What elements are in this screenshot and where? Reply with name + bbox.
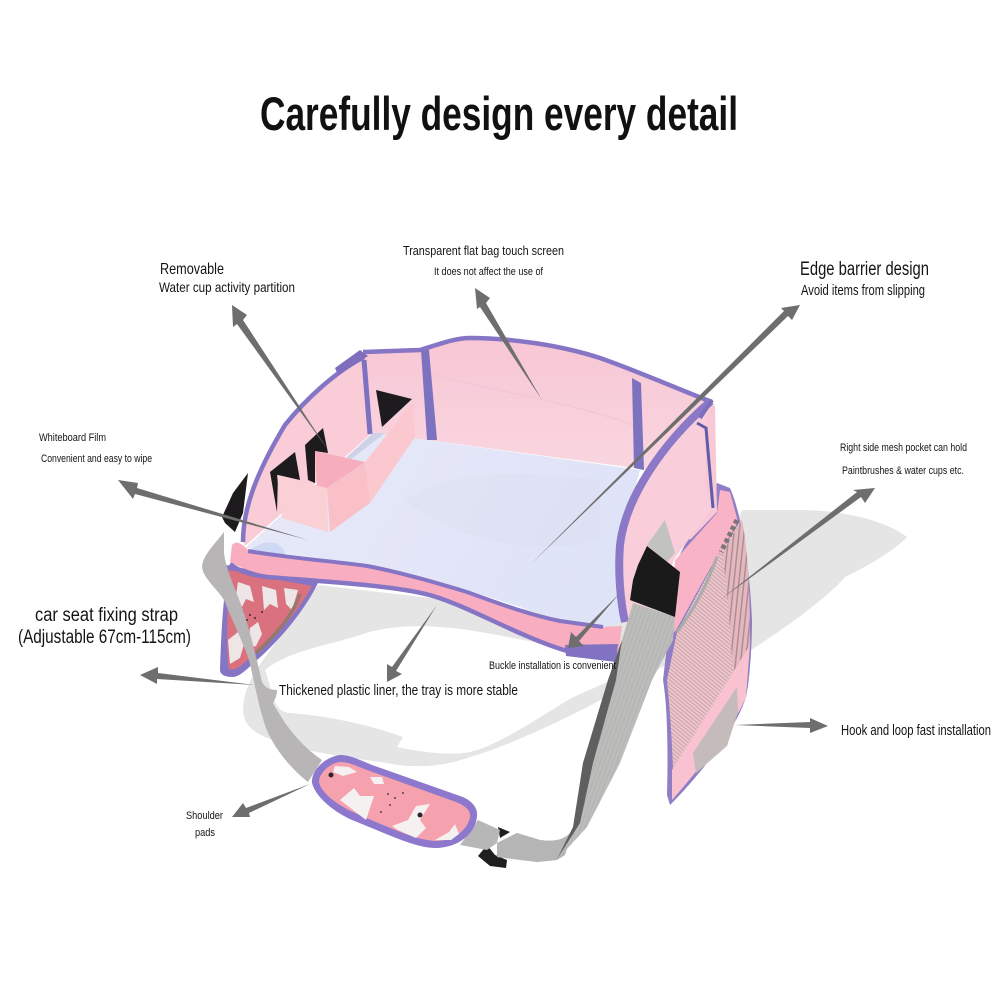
- left strap: [202, 532, 322, 782]
- label: transparent touch screen bag: It does not affect the use of: [434, 266, 544, 278]
- slider buckle: [478, 827, 510, 868]
- label: removable partition: Water cup activity partition: [159, 279, 295, 295]
- right strap: [460, 520, 675, 862]
- label: whiteboard film: Convenient and easy to wipe: [41, 453, 152, 465]
- label: car seat fixing strap: (Adjustable 67cm-115cm): [18, 627, 191, 648]
- label: whiteboard film: Whiteboard Film: [39, 432, 106, 444]
- arrow: hook and loop: [735, 718, 828, 733]
- label: removable partition: Removable: [160, 261, 224, 278]
- right wall exterior: [680, 405, 717, 540]
- mesh pocket: [667, 520, 750, 770]
- arrow: removable partition: [232, 305, 328, 450]
- removable water cup partition: [277, 402, 415, 532]
- label: edge barrier: Edge barrier design: [800, 259, 929, 280]
- title: Carefully design every detail: [260, 87, 738, 140]
- label: transparent touch screen bag: Transparent flat bag touch screen: [403, 243, 564, 258]
- label: shoulder pads: pads: [195, 827, 215, 839]
- arrow: car seat strap: [140, 667, 255, 685]
- right buckle: [630, 546, 680, 617]
- label: plastic liner: Thickened plastic liner, the tray is more stable: [279, 682, 518, 699]
- left buckle: [222, 473, 248, 532]
- back wall: [363, 338, 712, 470]
- arrow: right mesh pocket: [720, 488, 875, 600]
- arrow: buckle: [568, 593, 620, 648]
- arrow: transparent screen pocket: [475, 288, 542, 400]
- label: car seat fixing strap: car seat fixing strap: [35, 605, 178, 626]
- label: whiteboard film: [39, 432, 152, 465]
- left hanging pocket: [220, 565, 318, 677]
- ground shadow: [243, 510, 907, 766]
- label: edge barrier: [800, 259, 929, 299]
- pocket lower pink strip: [672, 645, 750, 800]
- padded front lip: [230, 543, 622, 662]
- pen loops: [721, 520, 737, 552]
- shoulder pad: [312, 755, 477, 848]
- text halo: [275, 674, 525, 704]
- label: buckle: Buckle installation is convenient: [489, 660, 616, 672]
- label: mesh pocket: Right side mesh pocket can hold: [840, 442, 967, 454]
- label: shoulder pads: Shoulder: [186, 810, 223, 822]
- arrow: shoulder pad: [232, 784, 310, 817]
- arrow: edge barrier: [530, 305, 800, 565]
- label: mesh pocket: Paintbrushes & water cups etc.: [842, 465, 964, 477]
- right pocket: [663, 483, 752, 805]
- product: travel tray: [202, 338, 752, 868]
- pocket pink upper: [668, 490, 738, 640]
- label: car seat fixing strap: [18, 605, 191, 648]
- label: edge barrier: Avoid items from slipping: [801, 282, 925, 299]
- label: transparent touch screen bag: [403, 243, 564, 278]
- hook and loop patch: [693, 687, 738, 773]
- arrow: whiteboard film: [118, 480, 308, 540]
- label: shoulder pads: [186, 810, 223, 839]
- right wall interior: [618, 400, 713, 640]
- whiteboard floor: [245, 433, 640, 628]
- arrow: plastic liner: [387, 605, 437, 682]
- label: mesh pocket: [840, 442, 967, 477]
- label: removable partition: [159, 261, 295, 295]
- left wall: [243, 350, 372, 546]
- velcro strips: [270, 390, 412, 512]
